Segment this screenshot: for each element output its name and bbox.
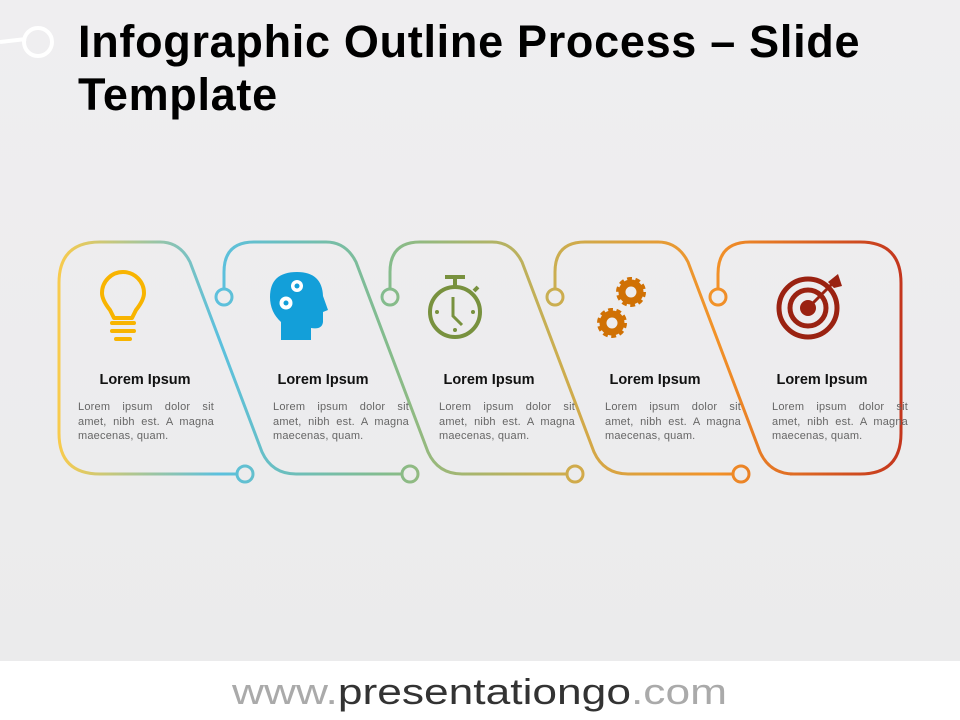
- text: Lorem Ipsum: [609, 372, 701, 388]
- text: Lorem ipsum dolor sit: [439, 401, 575, 413]
- outline shape 2: [224, 242, 567, 474]
- text: maecenas, quam.: [772, 430, 862, 442]
- title: Template: [78, 69, 278, 120]
- text: Lorem ipsum dolor sit: [772, 401, 908, 413]
- title: Infographic Outline Process – Slide: [78, 16, 860, 67]
- text: Lorem ipsum dolor sit: [273, 401, 409, 413]
- outline shape 5: [718, 242, 901, 474]
- icon: gears: [601, 281, 642, 334]
- text: maecenas, quam.: [273, 430, 363, 442]
- step 3 text: [439, 372, 575, 442]
- text: maecenas, quam.: [439, 430, 529, 442]
- outline shape 1: [59, 242, 402, 474]
- outline shape 4: [555, 242, 794, 474]
- text: amet, nibh est. A magna: [439, 416, 575, 428]
- text: amet, nibh est. A magna: [273, 416, 409, 428]
- icon: head with gears: [270, 272, 328, 340]
- step 4 text: [605, 372, 741, 442]
- step 1 text: [78, 372, 214, 442]
- text: amet, nibh est. A magna: [772, 416, 908, 428]
- text: Lorem Ipsum: [443, 372, 535, 388]
- text: Lorem Ipsum: [277, 372, 369, 388]
- connector circles: [216, 289, 749, 482]
- text: Lorem ipsum dolor sit: [78, 401, 214, 413]
- text: maecenas, quam.: [78, 430, 168, 442]
- step 5 text: [772, 372, 908, 442]
- footer url: www. presentationgo .com: [231, 671, 727, 712]
- text: Lorem Ipsum: [776, 372, 868, 388]
- outline shape 3: [390, 242, 733, 474]
- text: maecenas, quam.: [605, 430, 695, 442]
- title: [78, 16, 860, 120]
- decorative connector circle: [0, 26, 54, 58]
- text: amet, nibh est. A magna: [605, 416, 741, 428]
- text: Lorem Ipsum: [99, 372, 191, 388]
- step 2 text: [273, 372, 409, 442]
- icon: light bulb: [102, 272, 144, 339]
- icon: target: [779, 274, 842, 337]
- icon: stopwatch: [430, 277, 480, 337]
- text: Lorem ipsum dolor sit: [605, 401, 741, 413]
- text: amet, nibh est. A magna: [78, 416, 214, 428]
